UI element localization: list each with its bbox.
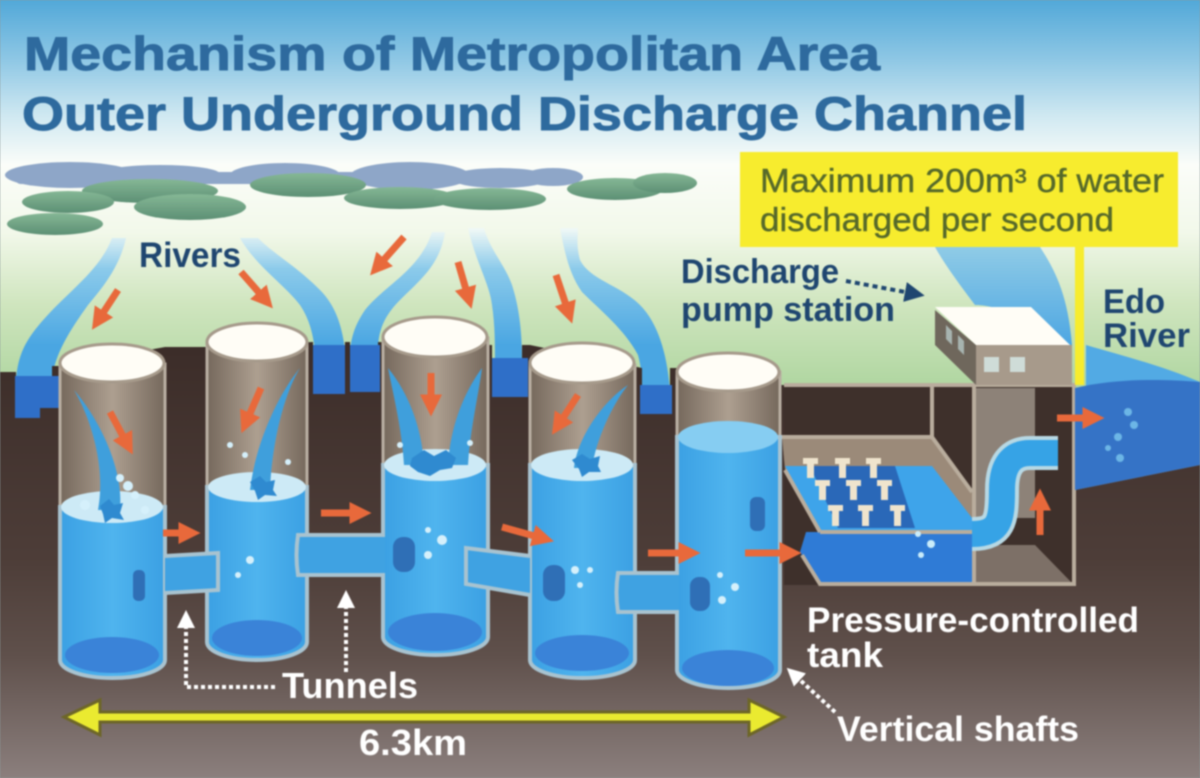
label: Pressure-controlled tank: tank xyxy=(807,636,884,675)
label: 6.3km: 6.3km xyxy=(359,722,467,763)
label: Vertical shafts: Vertical shafts xyxy=(837,710,1079,749)
underground xyxy=(0,342,1200,778)
label: Edo River: Edo xyxy=(1103,283,1165,321)
shaft 1 xyxy=(60,344,165,678)
pressure-controlled tank xyxy=(782,385,1074,585)
label: Rivers: Rivers xyxy=(139,236,241,275)
shaft 4 xyxy=(530,343,635,678)
rivers xyxy=(16,228,670,392)
discharge river xyxy=(935,247,1072,345)
Edo River water xyxy=(1075,345,1200,490)
yellow callout: discharged per second xyxy=(760,201,1114,238)
label: Edo River: River xyxy=(1103,317,1190,355)
sky background xyxy=(0,0,1200,165)
6.3km span arrow xyxy=(64,700,784,735)
label: Discharge pump station xyxy=(681,253,895,329)
yellow callout: Maximum 200m³ of water xyxy=(760,162,1164,199)
label: Discharge pump station: Discharge xyxy=(681,253,839,291)
bubbles xyxy=(80,440,739,604)
shaft 3 xyxy=(383,317,488,655)
river pools xyxy=(15,345,672,418)
title: Outer Underground Discharge Channel xyxy=(22,87,1027,140)
tank bubbles xyxy=(915,531,935,558)
label: Pressure-controlled tank: Pressure-controlled xyxy=(807,601,1139,640)
land background xyxy=(0,164,1200,390)
clouds and hills xyxy=(5,162,697,235)
label: Edo River xyxy=(1103,283,1190,355)
shaft 5 xyxy=(677,353,780,688)
title: Mechanism of Metropolitan Area xyxy=(24,27,881,80)
tunnels xyxy=(165,535,679,612)
yellow callout xyxy=(740,152,1178,385)
label: Pressure-controlled tank xyxy=(807,601,1139,675)
shaft 2 xyxy=(207,323,307,660)
orange flow arrows xyxy=(101,237,1088,553)
pump station building xyxy=(935,307,1072,385)
label: Discharge pump station: pump station xyxy=(681,291,895,329)
label: Tunnels: Tunnels xyxy=(282,665,418,706)
Tunnels dotted pointers xyxy=(186,608,835,712)
pump station dotted pointer xyxy=(846,281,905,292)
tank pillars xyxy=(803,458,905,526)
title xyxy=(22,27,1027,140)
